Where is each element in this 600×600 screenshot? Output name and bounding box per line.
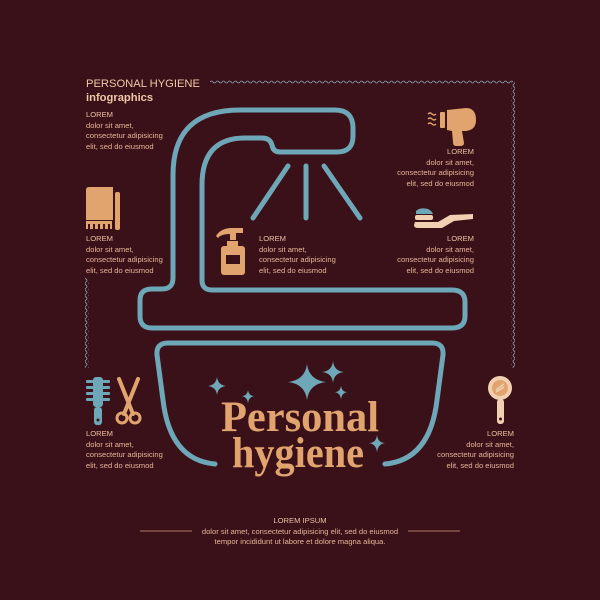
text: bottom center: dolor sit amet, consectetur adipisicing elit, sed do eiusmod [202, 527, 398, 536]
text: bottom right: LOREM [487, 429, 514, 438]
text: bottom right: consectetur adipisicing [437, 450, 514, 459]
text: middle left: consectetur adipisicing [86, 255, 163, 264]
sparkles [208, 361, 385, 452]
text: middle right [397, 234, 474, 275]
text: bottom right: elit, sed do eiusmod [446, 461, 514, 470]
text: top right: dolor sit amet, [426, 158, 474, 167]
text: top right: consectetur adipisicing [397, 168, 474, 177]
text: middle right: dolor sit amet, [426, 245, 474, 254]
heading: PERSONAL HYGIENE [86, 78, 200, 90]
text: top right: elit, sed do eiusmod [406, 179, 474, 188]
text: top left: dolor sit amet, [86, 121, 134, 130]
text: top right [397, 147, 474, 188]
faucet outline [140, 110, 465, 328]
text: middle right: consectetur adipisicing [397, 255, 474, 264]
text: top right: LOREM [447, 147, 474, 156]
text: center: elit, sed do eiusmod [259, 266, 327, 275]
text: bottom left: consectetur adipisicing [86, 450, 163, 459]
text: middle right: LOREM [447, 234, 474, 243]
text: bottom right [437, 429, 514, 470]
heading: infographics [86, 92, 153, 104]
text: top left: LOREM [86, 110, 113, 119]
icon: hair brush [86, 377, 110, 425]
icon: toothbrush [414, 208, 473, 228]
text: bottom left: dolor sit amet, [86, 440, 134, 449]
title text [221, 394, 379, 477]
icon: soap dispenser [216, 228, 245, 275]
text: top left: consectetur adipisicing [86, 131, 163, 140]
text: center: dolor sit amet, [259, 245, 307, 254]
text: bottom center: tempor incididunt ut labore et dolore magna aliqua. [215, 537, 385, 546]
text: bottom center: LOREM IPSUM [273, 516, 327, 525]
text: middle right: elit, sed do eiusmod [406, 266, 474, 275]
heading [86, 78, 200, 104]
bottom divider lines [140, 530, 460, 532]
text: center: LOREM [259, 234, 286, 243]
text: center: consectetur adipisicing [259, 255, 336, 264]
text: middle left: elit, sed do eiusmod [86, 266, 154, 275]
text: top left [86, 110, 163, 151]
icon: towel [86, 187, 120, 230]
text: bottom left [86, 429, 163, 470]
text: center [259, 234, 336, 275]
text: middle left: LOREM [86, 234, 113, 243]
text: top left: elit, sed do eiusmod [86, 142, 154, 151]
icon: hand mirror [488, 376, 512, 424]
text: middle left: dolor sit amet, [86, 245, 134, 254]
text: bottom right: dolor sit amet, [466, 440, 514, 449]
shower rays [253, 166, 360, 218]
text: middle left [86, 234, 163, 275]
icon: hairdryer [428, 108, 476, 146]
text: bottom left: elit, sed do eiusmod [86, 461, 154, 470]
text: bottom left: LOREM [86, 429, 113, 438]
text: bottom center [202, 516, 398, 546]
icon: scissors [117, 379, 140, 423]
title text: hygiene [232, 430, 364, 477]
basin [157, 343, 443, 464]
title text: Personal [221, 394, 379, 441]
